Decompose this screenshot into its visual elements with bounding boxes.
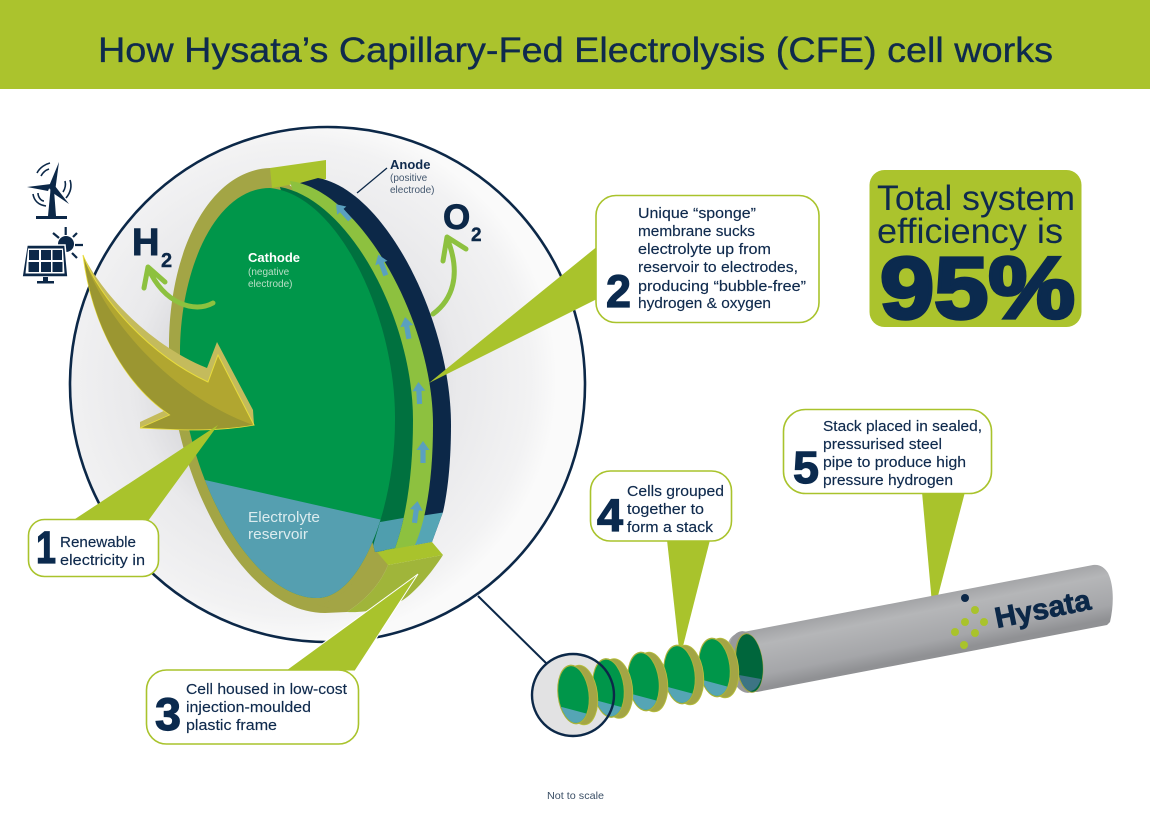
callout 4: 4 (597, 490, 623, 541)
callout 4 (590, 471, 732, 541)
icon: wind turbine (27, 162, 71, 219)
sponge membrane (290, 181, 433, 552)
callout 2: hydrogen & oxygen (638, 296, 771, 312)
anode label: (positive (390, 173, 428, 184)
callout 3: injection-moulded (186, 700, 311, 716)
not to scale note: Not to scale (547, 790, 604, 802)
callout 3 (146, 670, 358, 744)
frame lower corner (317, 542, 443, 612)
steel pipe (724, 565, 1113, 695)
electrolyte in dark layer (373, 518, 404, 552)
stack lens circle fill (532, 654, 614, 736)
O2 label: 2 (471, 225, 482, 246)
callout 5: Stack placed in sealed, (823, 419, 982, 435)
H2 label (132, 222, 172, 272)
efficiency panel: Total system (877, 179, 1075, 218)
callout 3: Cell housed in low-cost (186, 682, 347, 698)
cathode label: electrode) (248, 279, 292, 290)
callout 1: 1 (36, 522, 56, 573)
callout 4: together to (627, 502, 704, 518)
anode label (357, 157, 434, 196)
title: How Hysata’s Capillary-Fed Electrolysis (CFE) cell works (98, 31, 1053, 70)
callout 4: form a stack (627, 520, 714, 536)
header banner (0, 0, 1150, 89)
callout 4: Cells grouped (627, 484, 724, 500)
cell frame (169, 160, 395, 613)
anode label: Anode (390, 157, 430, 172)
efficiency panel: efficiency is (877, 212, 1063, 251)
cathode label (248, 250, 300, 290)
H2 label: H (132, 222, 159, 264)
efficiency panel: 95% (880, 240, 1075, 337)
electrolyte reservoir (205, 480, 380, 598)
callout 2: 2 (606, 266, 631, 317)
dark green layer (280, 187, 413, 552)
pointer 4 (667, 540, 710, 658)
connector line to stack detail (478, 596, 546, 663)
callout 5: pressure hydrogen (823, 473, 953, 489)
H2 arrow (144, 267, 213, 307)
callout 5: pressurised steel (823, 437, 942, 453)
electrolyte flow arrows (331, 200, 430, 524)
O2 label: O (443, 198, 470, 237)
callout 1: electricity in (60, 553, 145, 569)
renewable electricity arrow (83, 255, 254, 430)
callout 5: pipe to produce high (823, 455, 966, 471)
cathode label: Cathode (248, 250, 300, 265)
pointer 5 (922, 492, 965, 615)
pointer 1 (72, 425, 218, 521)
O2 label (443, 198, 482, 246)
callout 2: producing “bubble-free” (638, 279, 806, 295)
anode (300, 178, 451, 552)
electrolyte reservoir label (248, 510, 320, 543)
Hysata logo (951, 584, 1094, 649)
cells (554, 636, 742, 727)
icon: solar panel (22, 227, 83, 284)
anode label: electrode) (390, 185, 434, 196)
electrolyte reservoir label: Electrolyte (248, 510, 320, 526)
Hysata logo: Hysata (992, 584, 1094, 635)
callout 5: 5 (793, 442, 819, 493)
callout 3: 3 (155, 689, 181, 740)
pointer 3 (285, 574, 418, 671)
cathode (180, 188, 395, 598)
callout 1 (28, 520, 158, 576)
pointer 2 (429, 245, 599, 383)
callout 2: membrane sucks (638, 224, 755, 240)
stack lens circle outline (532, 654, 614, 736)
H2 label: 2 (161, 250, 172, 272)
callout 2 (596, 196, 819, 322)
efficiency panel (870, 170, 1082, 337)
callout 5 (784, 410, 992, 494)
callout 2: reservoir to electrodes, (638, 260, 798, 276)
cathode label: (negative (248, 267, 290, 278)
O2 arrow (433, 237, 466, 314)
callout 1: Renewable (60, 535, 136, 551)
callout 3: plastic frame (186, 718, 277, 734)
magnified cell lens (70, 127, 585, 642)
stack of cells and steel pipe (532, 565, 1113, 736)
electrolyte reservoir label: reservoir (248, 527, 308, 543)
callout 2: electrolyte up from (638, 242, 771, 258)
electrolyte behind layers (377, 512, 443, 552)
callout 2: Unique “sponge” (638, 206, 756, 222)
